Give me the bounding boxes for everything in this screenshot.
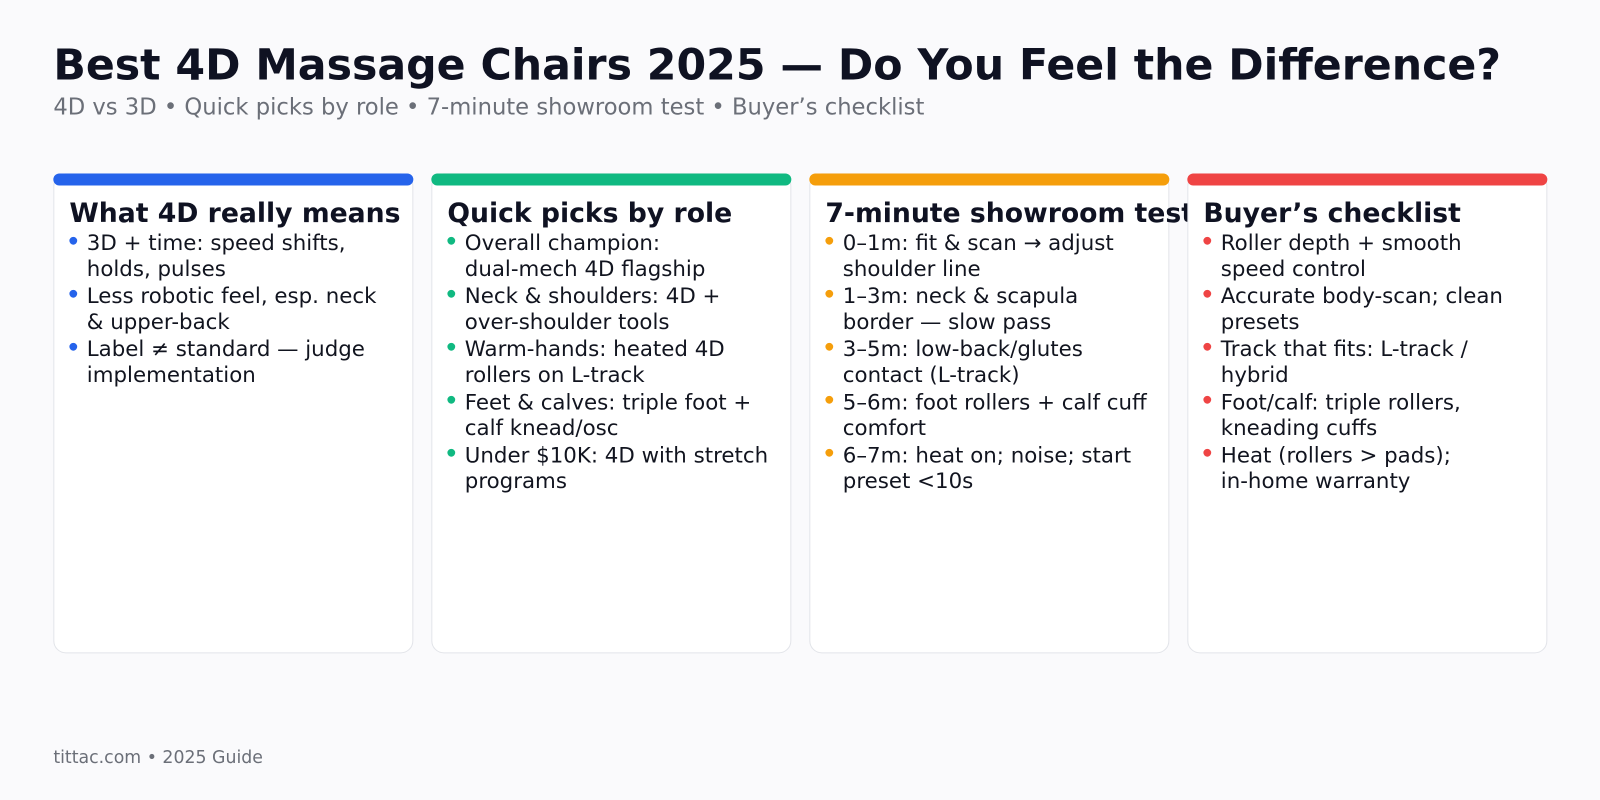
list: buyer's checklist: speed control [1221, 257, 1366, 282]
list: quick picks by role: Under $10K: 4D with stretch [465, 444, 768, 468]
list: buyer's checklist: kneading cuffs [1221, 416, 1377, 441]
subtitle: 4D vs 3D • Quick picks by role • 7-minute showroom test • Buyer’s checklist [53, 94, 924, 120]
list: quick picks by role: rollers on L-track [465, 363, 645, 388]
list: buyer's checklist: Heat (rollers > pads); [1221, 444, 1451, 468]
list: 7-minute showroom test: 3–5m: low-back/glutes [843, 337, 1083, 362]
list: 7-minute showroom test: border — slow pass [843, 310, 1051, 335]
list: 7-minute showroom test: preset <10s [843, 469, 973, 494]
list: buyer's checklist [1203, 231, 1503, 494]
list: quick picks by role: calf knead/osc [465, 416, 618, 441]
list: quick picks by role: programs [465, 469, 567, 494]
list: 7-minute showroom test: contact (L-track) [843, 363, 1020, 388]
list: 7-minute showroom test: 0–1m: fit & scan → adjust [843, 231, 1114, 256]
list: what 4D really means: implementation [87, 363, 256, 388]
list: what 4D really means: holds, pulses [87, 257, 226, 282]
list: buyer's checklist: Roller depth + smooth [1221, 231, 1462, 256]
list: 7-minute showroom test: 6–7m: heat on; noise; start [843, 444, 1131, 468]
list: 7-minute showroom test: 5–6m: foot rollers + calf cuff [843, 390, 1148, 416]
list: buyer's checklist: hybrid [1221, 363, 1289, 388]
footer: tittac.com • 2025 Guide [53, 748, 263, 768]
list: what 4D really means: 3D + time: speed shifts, [87, 231, 346, 256]
list: what 4D really means [69, 231, 377, 388]
list: 7-minute showroom test: comfort [843, 416, 926, 441]
panel: buyer's checklist [1187, 174, 1547, 653]
list: buyer's checklist: Foot/calf: triple rollers, [1221, 390, 1461, 416]
list: quick picks by role [447, 231, 768, 494]
list: buyer's checklist: Accurate body-scan; clean [1221, 284, 1503, 309]
heading: buyer's checklist: Buyer’s checklist [1203, 198, 1461, 229]
list: what 4D really means: Less robotic feel, esp. neck [87, 284, 377, 309]
heading: quick picks by role: Quick picks by role [447, 198, 732, 229]
list: buyer's checklist: Track that fits: L-track / [1220, 337, 1469, 362]
list: quick picks by role: over-shoulder tools [465, 310, 670, 335]
panel: what 4D really means [53, 174, 413, 653]
list: what 4D really means: & upper-back [87, 310, 230, 335]
heading: what 4D really means: What 4D really means [69, 198, 401, 229]
title: Best 4D Massage Chairs 2025 — Do You Feel the Difference? [53, 40, 1501, 90]
list: buyer's checklist: in-home warranty [1221, 469, 1410, 494]
list: what 4D really means: Label ≠ standard — judge [87, 337, 365, 362]
list: quick picks by role: Feet & calves: triple foot + [465, 390, 751, 416]
list: buyer's checklist: presets [1221, 310, 1299, 335]
list: quick picks by role: Overall champion: [465, 231, 660, 256]
heading: 7-minute showroom test: 7-minute showroom test [825, 198, 1194, 229]
panel: quick picks by role [431, 174, 791, 653]
panel: 7-minute showroom test [809, 174, 1194, 653]
list: quick picks by role: Warm-hands: heated 4D [465, 337, 725, 362]
list: 7-minute showroom test: 1–3m: neck & scapula [843, 284, 1078, 309]
list: 7-minute showroom test [825, 231, 1148, 494]
list: quick picks by role: Neck & shoulders: 4D + [465, 284, 720, 309]
list: quick picks by role: dual-mech 4D flagship [465, 257, 705, 282]
list: 7-minute showroom test: shoulder line [843, 257, 981, 282]
